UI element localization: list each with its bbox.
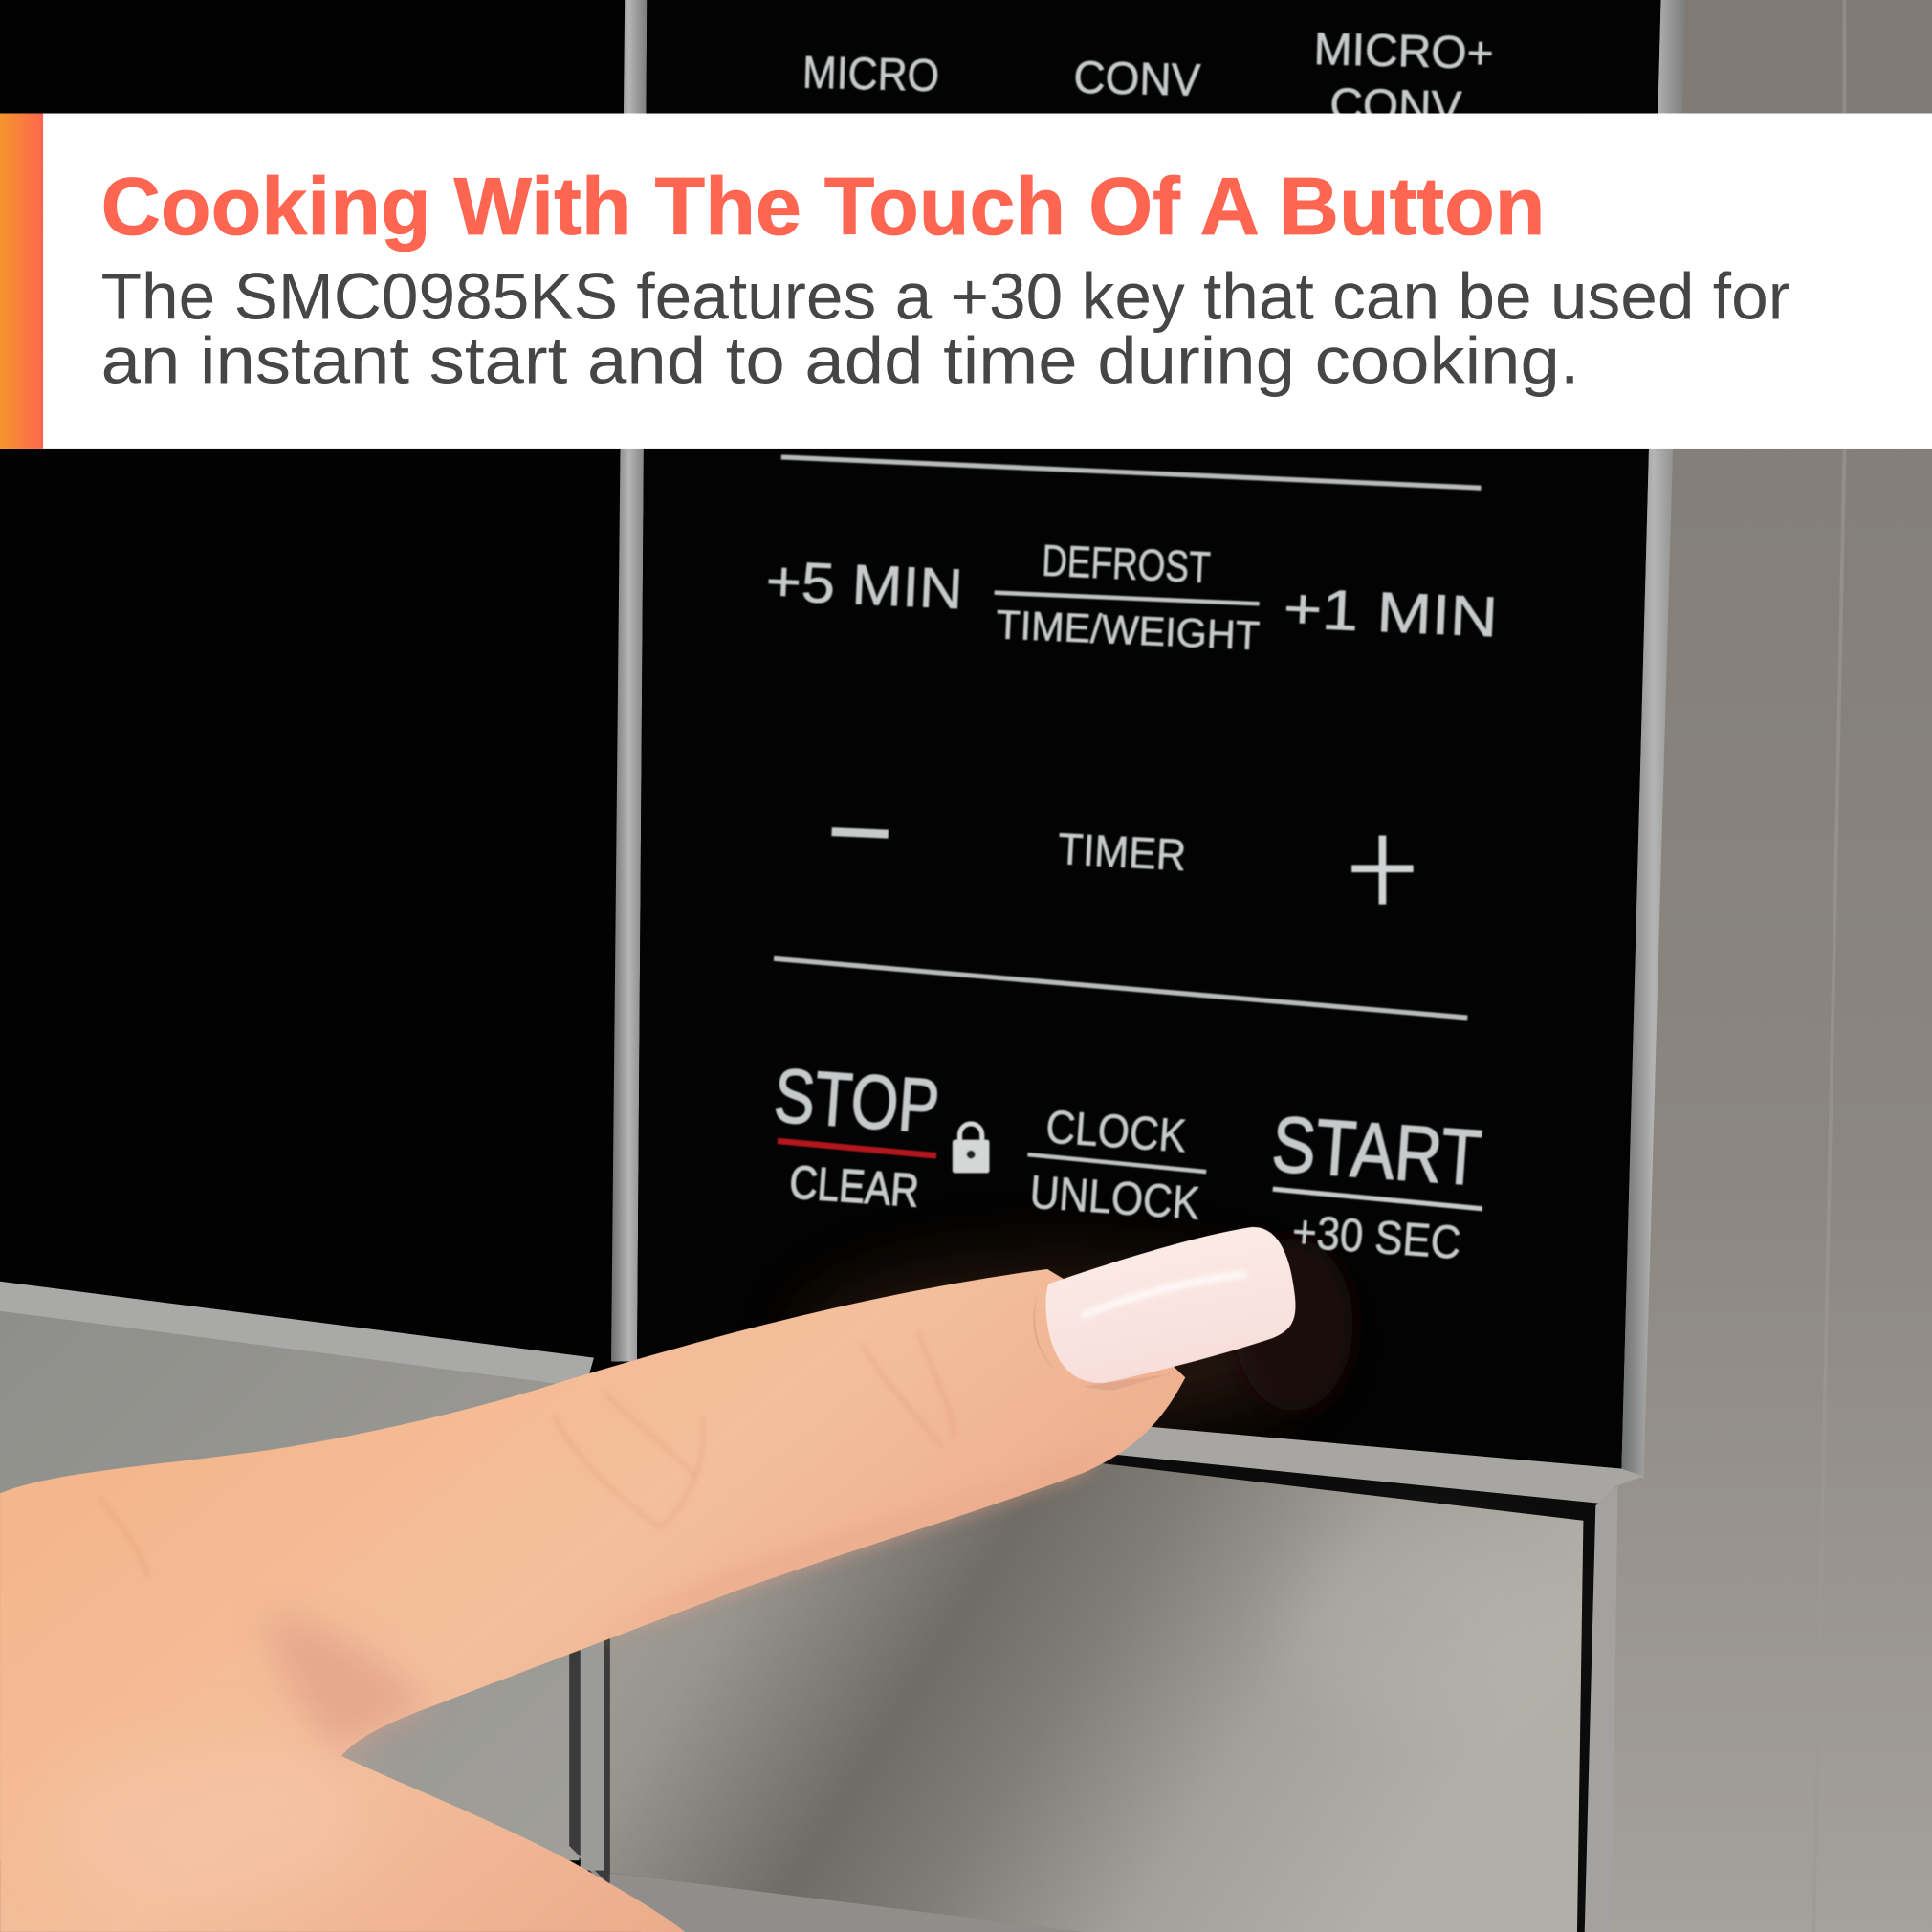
left panel trim bbox=[0, 1282, 594, 1385]
label: +30 SEC: +30 SEC bbox=[1290, 1206, 1462, 1269]
vertical door trim bbox=[569, 1602, 610, 1885]
gradient accent bar bbox=[0, 114, 43, 449]
label: UNLOCK: UNLOCK bbox=[1028, 1167, 1201, 1230]
left gray door panel bbox=[0, 1306, 579, 1860]
label: START: START bbox=[1269, 1100, 1484, 1202]
left black display panel bbox=[0, 0, 631, 1360]
finger underside shade bbox=[591, 1441, 1109, 1645]
right black control panel bbox=[637, 0, 1661, 1469]
bottom strip under door bbox=[569, 1846, 1109, 1932]
hand highlight bbox=[50, 1749, 369, 1898]
finger web shading bbox=[265, 1614, 433, 1756]
lower door panel bbox=[610, 1461, 1583, 1932]
description line 2: an instant start and to add time during cooking. bbox=[101, 325, 1580, 398]
label: MICRO+: MICRO+ bbox=[1313, 24, 1494, 79]
door brushed highlight bbox=[1282, 1527, 1552, 1725]
label: MICRO: MICRO bbox=[801, 47, 940, 101]
middle divider line bbox=[774, 958, 1467, 1018]
under-panel horizontal trim bbox=[1085, 1423, 1644, 1505]
icon: lock bbox=[953, 1124, 989, 1173]
banner bbox=[0, 114, 1932, 449]
side seam bbox=[1813, 0, 1845, 1932]
knuckle creases bbox=[99, 1330, 955, 1577]
control panel labels bbox=[764, 24, 1499, 1269]
lower right trim bbox=[1585, 1486, 1617, 1932]
label: +5 MIN: +5 MIN bbox=[764, 548, 964, 621]
finger shape bbox=[0, 1269, 1185, 1932]
label: TIME/WEIGHT: TIME/WEIGHT bbox=[995, 603, 1261, 659]
nail reflection bbox=[1235, 1239, 1353, 1411]
nail highlight bbox=[1082, 1274, 1247, 1316]
label: TIMER: TIMER bbox=[1057, 823, 1187, 880]
title: Cooking With The Touch Of A Button bbox=[101, 162, 1545, 252]
red stop divider bbox=[778, 1141, 936, 1155]
label: CONV: CONV bbox=[1073, 53, 1201, 106]
center vertical trim bbox=[611, 0, 647, 1362]
banner background bbox=[0, 114, 1932, 449]
minus key bbox=[832, 832, 889, 834]
label: CLEAR: CLEAR bbox=[788, 1156, 920, 1218]
defrost divider bbox=[995, 593, 1260, 604]
description bbox=[101, 261, 1790, 398]
panel warm reflection bbox=[801, 1257, 1318, 1429]
top divider line bbox=[781, 457, 1481, 488]
nail cuticle bbox=[1033, 1294, 1171, 1390]
label: DEFROST: DEFROST bbox=[1041, 536, 1212, 592]
plus key bbox=[1351, 835, 1414, 905]
label: CONV second line: CONV bbox=[1329, 79, 1462, 134]
vertical door trim highlight bbox=[581, 1614, 604, 1871]
right stainless side bbox=[1590, 0, 1932, 1932]
label: +1 MIN: +1 MIN bbox=[1283, 576, 1499, 648]
icon: fingernail bbox=[1045, 1227, 1295, 1383]
start divider bbox=[1273, 1189, 1482, 1209]
lower door shadow gap bbox=[1085, 1452, 1598, 1932]
label: STOP: STOP bbox=[772, 1052, 942, 1149]
clock divider bbox=[1027, 1154, 1206, 1172]
description line 1: The SMC0985KS features a +30 key that can be used for bbox=[101, 261, 1790, 334]
right panel vertical trim bbox=[1621, 0, 1685, 1479]
hand: pointing finger bbox=[0, 1227, 1295, 1932]
label: CLOCK: CLOCK bbox=[1044, 1101, 1188, 1162]
